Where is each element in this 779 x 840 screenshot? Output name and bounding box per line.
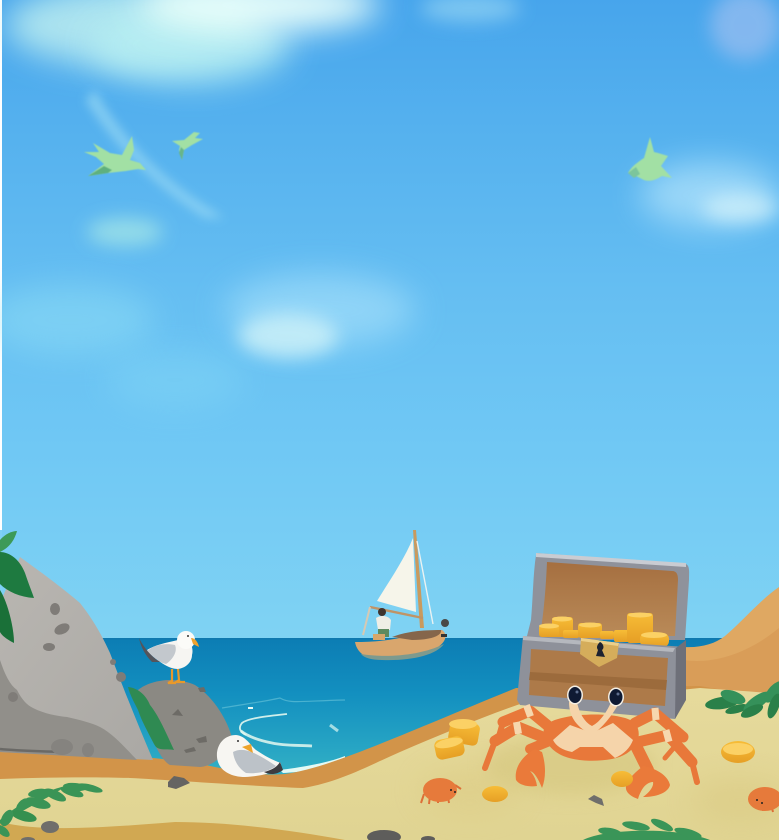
sand fern bottom left (0, 781, 103, 839)
palm leaves on left (0, 531, 34, 643)
crab claw right (626, 766, 670, 799)
hull (355, 630, 445, 658)
crab belly (553, 723, 633, 758)
small crab left (421, 778, 461, 804)
mast (413, 530, 424, 628)
leg joints (513, 704, 672, 743)
chest body (517, 636, 686, 719)
sand: light ground (0, 688, 779, 840)
boom (370, 607, 423, 618)
sky (0, 0, 779, 650)
rock pebbles (8, 603, 126, 757)
bird: small left (172, 132, 203, 160)
dune on right (684, 587, 779, 700)
crab body (544, 714, 639, 761)
stern fitting (441, 619, 449, 627)
bird: large left (84, 136, 146, 176)
crab legs (485, 711, 697, 782)
clouds (0, 0, 779, 410)
fern right (704, 678, 779, 721)
sail (377, 538, 416, 612)
sea (100, 638, 740, 799)
small crab right (748, 787, 779, 812)
coins on sand (433, 719, 755, 802)
treasure chest (517, 553, 689, 719)
sand: orange bank (0, 686, 779, 840)
chest lid (526, 553, 689, 640)
seagull on sand (217, 735, 283, 777)
seagull on rock (139, 631, 199, 683)
coins inside (539, 613, 669, 647)
crab eyes and stalks (569, 700, 619, 735)
fern bottom (583, 816, 710, 840)
hanging leaf between rocks (128, 687, 174, 750)
small right rock (138, 680, 232, 767)
sand pebbles (21, 776, 604, 840)
big crab (485, 686, 697, 799)
sailor (378, 608, 386, 616)
crab claw left (516, 749, 545, 788)
sailboat (355, 530, 449, 660)
large left rock (0, 557, 153, 760)
bird: right (628, 137, 672, 181)
lock plate (580, 638, 619, 667)
